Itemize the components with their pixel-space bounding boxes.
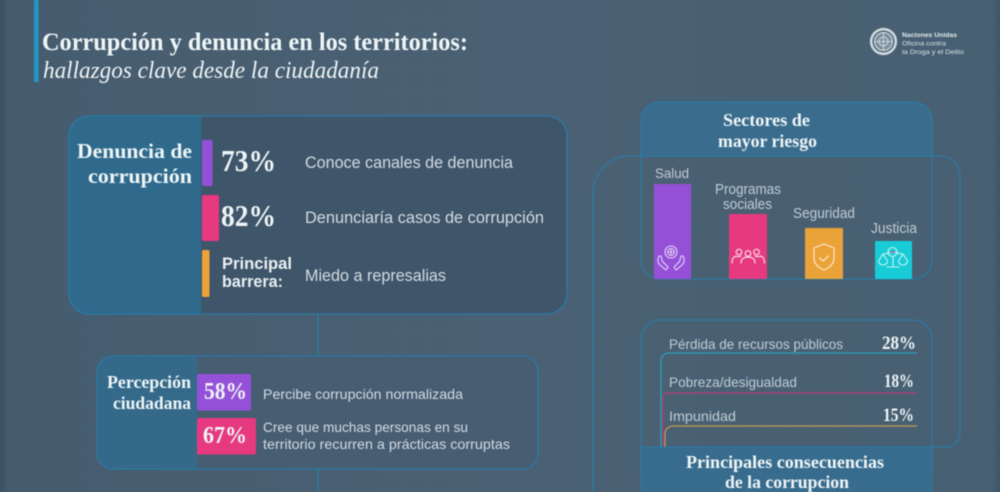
icon: UN emblem [871, 29, 896, 54]
heading: denuncia: Denuncia de [77, 139, 192, 163]
row: 67%: territorio recurren a prácticas corruptas [263, 436, 510, 452]
row: 58% [197, 374, 463, 410]
icon: shield with check [814, 244, 834, 270]
row: impunidad: Impunidad [669, 408, 736, 424]
bar: seguridad [793, 206, 855, 279]
outline: right connector frame [593, 156, 960, 492]
row: 58%: 58% [204, 379, 247, 405]
row: 82%: 82% [221, 198, 276, 233]
panel: denuncia de corrupción [69, 116, 567, 314]
title: Corrupción y denuncia en los territorios: [42, 29, 468, 56]
row: pérdida de recursos públicos [661, 333, 917, 447]
row: 58%: Percibe corrupción normalizada [263, 386, 463, 402]
panel: percepción ciudadana [97, 356, 538, 469]
heading: sectores [718, 110, 817, 151]
title [42, 29, 468, 84]
header band: consecuencias: de la corrupcion [725, 472, 849, 492]
row: principal barrera [202, 250, 446, 297]
header band: consecuencias [641, 447, 932, 492]
row: principal barrera: Miedo a represalias [305, 267, 446, 285]
title: hallazgos clave desde la ciudadanía [43, 58, 379, 84]
row: 67%: 67% [203, 423, 247, 449]
row: pobreza/desigualdad: Pobreza/desigualdad [669, 374, 797, 390]
icon: hands with medical cross [658, 246, 684, 270]
icon: scales of justice [878, 248, 908, 267]
row: principal barrera: Principal [222, 254, 292, 273]
logo: Naciones Unidas: Naciones Unidas [902, 32, 957, 39]
bar: programas sociales: Programas [715, 182, 781, 198]
heading: sectores: Sectores de [723, 110, 810, 130]
row: principal barrera: barrera: [222, 272, 283, 291]
heading: denuncia [77, 139, 192, 188]
heading: percepción: Percepción [107, 372, 191, 392]
bar: programas sociales: sociales [723, 197, 772, 213]
row: 82% [202, 195, 544, 241]
logo: Naciones Unidas [871, 29, 964, 56]
row: 73%: Conoce canales de denuncia [305, 154, 514, 172]
panel: sectores de mayor riesgo [641, 102, 932, 279]
bar: salud [654, 165, 691, 279]
row: impunidad: 15% [883, 405, 914, 426]
bar: programas sociales [715, 182, 781, 279]
heading: sectores: mayor riesgo [718, 131, 817, 151]
row: 67% [197, 418, 510, 454]
logo: Naciones Unidas: Oficina contra [902, 40, 946, 48]
row: 82%: Denunciaría casos de corrupción [305, 209, 544, 227]
row: 73%: 73% [221, 143, 276, 178]
row: pobreza/desigualdad [663, 371, 917, 447]
bar chart: sectores [654, 165, 918, 279]
row: pérdida de recursos públicos: Pérdida de recursos públicos [669, 336, 843, 352]
icon: people group [732, 249, 764, 263]
logo: Naciones Unidas: la Droga y el Delito [902, 49, 964, 56]
row: 67%: Cree que muchas personas en su [263, 419, 468, 435]
heading: percepción [107, 372, 191, 413]
header band: consecuencias: Principales consecuencias [686, 452, 884, 472]
panel: principales consecuencias [641, 320, 932, 492]
bar: seguridad: Seguridad [793, 206, 855, 222]
connector between panels [317, 314, 319, 492]
row: impunidad [665, 405, 917, 447]
row: pobreza/desigualdad: 18% [884, 371, 914, 392]
bar: salud: Salud [655, 165, 689, 181]
row: 73% [202, 140, 514, 186]
title accent bar [34, 0, 38, 82]
row: pérdida de recursos públicos: 28% [882, 333, 916, 354]
bar: justicia [871, 221, 918, 279]
bar: justicia: Justicia [871, 221, 918, 237]
heading: percepción: ciudadana [113, 393, 191, 413]
heading: denuncia: corrupción [88, 164, 192, 188]
